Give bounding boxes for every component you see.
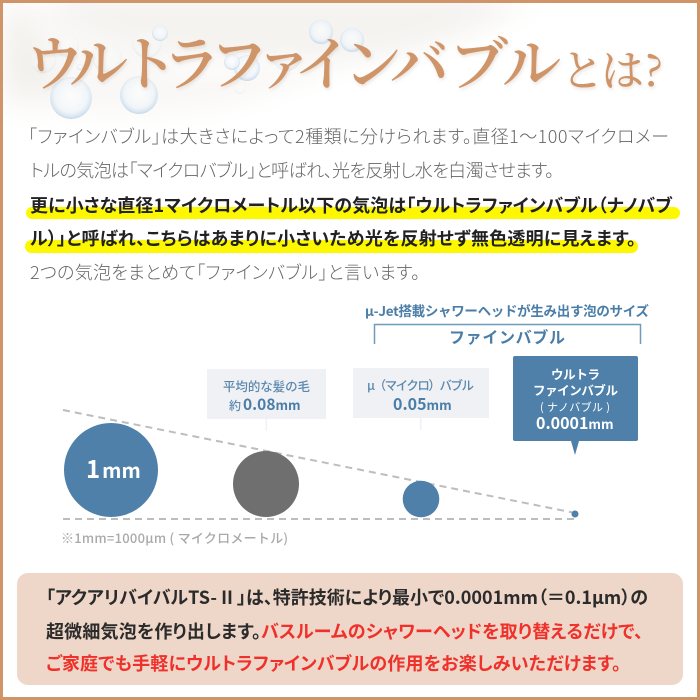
yellow highlighted statement bbox=[25, 192, 680, 253]
panel: product summary: 超微細気泡を作り出します。 bbox=[46, 618, 261, 644]
intro paragraph: 「ファインバブル」は大きさによって2種類に分けられます。直径1〜100マイクロメー bbox=[28, 123, 669, 149]
panel: product summary: バスルームのシャワーヘッドを取り替えるだけで、 bbox=[261, 618, 643, 644]
header cream cloth background bbox=[0, 0, 540, 113]
intro paragraph bbox=[28, 123, 669, 183]
dashed size guide lines bbox=[63, 410, 575, 519]
yellow highlighted statement: 更に小さな直径1マイクロメートル以下の気泡は「ウルトラファインバブル（ナノバブ bbox=[30, 192, 673, 218]
callout: hair: 0.08mm bbox=[243, 393, 301, 415]
circle: 1mm bbox=[64, 423, 158, 517]
circle: hair bbox=[233, 451, 299, 517]
yellow highlighted statement: ル）」と呼ばれ、こちらはあまりに小さいため光を反射せず無色透明に見えます。 bbox=[30, 225, 636, 251]
callout: ultra fine bubble: ( ナノバブル ) bbox=[540, 399, 610, 415]
panel: product summary: ご家庭でも手軽にウルトラファインバブルの作用をお楽しみいただけます。 bbox=[46, 650, 621, 676]
bracket: fine bubble range: ファインバブル bbox=[449, 324, 565, 348]
callout: micro bubble bbox=[353, 368, 489, 430]
circle: micro bubble bbox=[403, 481, 439, 517]
soap bubbles bbox=[30, 20, 364, 119]
title: とは? bbox=[561, 38, 663, 99]
callout: ultra fine bubble bbox=[513, 356, 638, 455]
callout: ultra fine bubble: 0.0001mm bbox=[536, 410, 613, 434]
callout: micro bubble: 0.05mm bbox=[393, 391, 452, 415]
intro paragraph: トルの気泡は「マイクロバブル」と呼ばれ、光を反射し水を白濁させます。 bbox=[30, 157, 554, 183]
title: ウルトラファインバブル bbox=[25, 17, 561, 102]
panel: product summary: 「アクアリバイバルTS- II 」は、特許技術により最小で0.0001mm（＝0.1μm）の bbox=[46, 584, 648, 610]
bracket: fine bubble range bbox=[374, 324, 640, 348]
footnote: ※1mm=1000μm ( マイクロメートル) bbox=[61, 528, 288, 547]
callout: ultra fine bubble: ファインバブル bbox=[533, 380, 618, 399]
circle: 1mm: 1mm bbox=[86, 450, 141, 485]
callout: hair: 約 bbox=[229, 397, 241, 414]
callout: ultra fine bubble: ウルトラ bbox=[551, 364, 600, 383]
closing sentence: 2つの気泡をまとめて「ファインバブル」と言います。 bbox=[30, 259, 420, 285]
circle: ultra fine bubble bbox=[572, 510, 578, 518]
callout: hair bbox=[207, 369, 326, 431]
heading: bubble size: μ-Jet搭載シャワーヘッドが生み出す泡のサイズ bbox=[365, 300, 650, 320]
callout: hair: 平均的な髪の毛 bbox=[223, 376, 310, 395]
callout: micro bubble: μ（マイクロ）バブル bbox=[367, 375, 474, 394]
panel: product summary bbox=[17, 573, 683, 685]
